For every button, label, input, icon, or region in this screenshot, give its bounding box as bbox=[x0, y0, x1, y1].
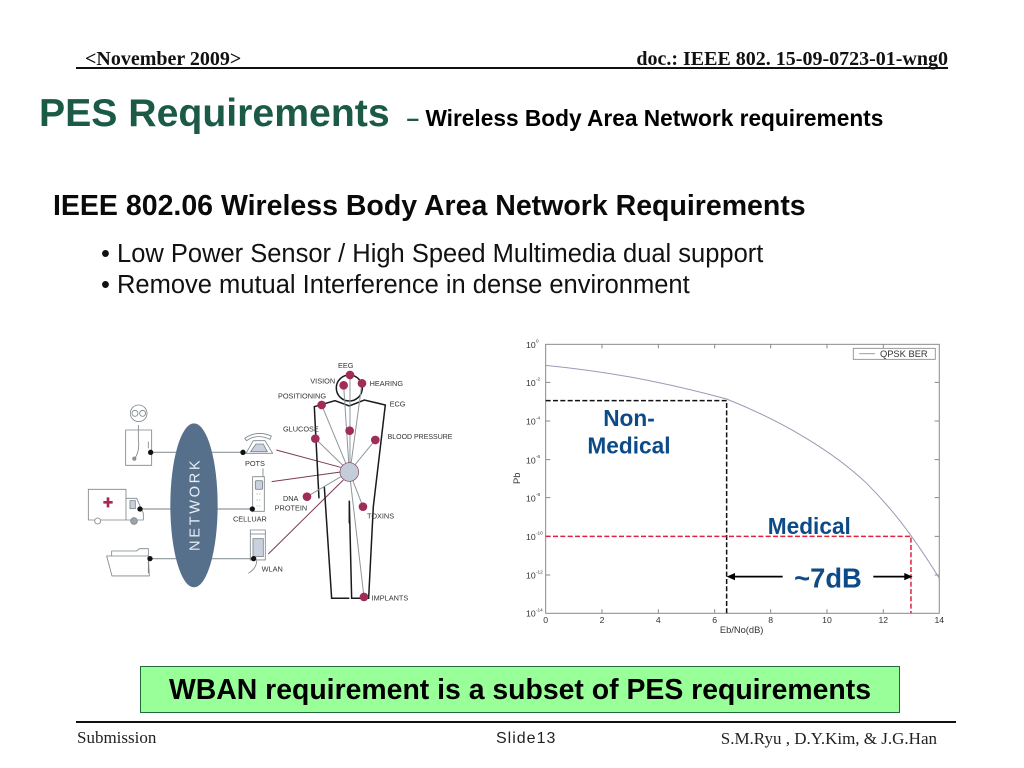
wireless links to hub bbox=[268, 450, 343, 554]
y axis labels: 10 bbox=[526, 417, 536, 427]
sensor labels: EEG bbox=[338, 361, 354, 370]
footer submission: Submission bbox=[77, 728, 156, 747]
x axis labels: 6 bbox=[712, 615, 717, 625]
callout bbox=[140, 666, 900, 713]
footer rule bbox=[76, 721, 956, 723]
y axis exponents: 0 bbox=[536, 339, 539, 344]
network connection lines bbox=[140, 452, 254, 559]
icon: wlan device: WLAN bbox=[262, 564, 283, 573]
y axis labels: 10 bbox=[526, 532, 536, 542]
BER curve bbox=[546, 365, 939, 578]
sensor labels: PROTEIN bbox=[275, 504, 307, 513]
bullet list: • Remove mutual Interference in dense environment bbox=[101, 271, 690, 299]
chart annotations: Non- bbox=[603, 405, 655, 431]
bullet list: • Low Power Sensor / High Speed Multimedia dual support bbox=[101, 240, 763, 268]
chart annotations: Medical bbox=[768, 513, 851, 539]
icon: folder bbox=[107, 549, 153, 576]
y axis exponents bbox=[536, 339, 543, 612]
y axis labels: 10 bbox=[526, 340, 536, 350]
y axis labels: 10 bbox=[526, 455, 536, 465]
x axis labels: 10 bbox=[822, 615, 832, 625]
hub bbox=[340, 463, 359, 481]
header date: <November 2009> bbox=[85, 48, 241, 70]
non-medical threshold bbox=[546, 401, 727, 613]
icon: ambulance bbox=[88, 489, 143, 524]
chart annotations: ~7dB bbox=[794, 562, 862, 593]
y axis exponents: -10 bbox=[536, 531, 543, 536]
section heading: IEEE 802.06 Wireless Body Area Network Requirements bbox=[53, 190, 806, 222]
title: PES Requirements – Wireless Body Area Network requirements bbox=[39, 92, 883, 135]
x axis labels: 0 bbox=[543, 615, 548, 625]
icon: telephone bbox=[240, 433, 273, 468]
x axis labels bbox=[543, 615, 944, 625]
y axis labels: 10 bbox=[526, 571, 536, 581]
legend bbox=[853, 348, 935, 359]
sensor links bbox=[307, 375, 375, 597]
sensor labels: HEARING bbox=[370, 379, 403, 388]
sensor labels: TOXINS bbox=[367, 511, 394, 520]
header document number: doc.: IEEE 802. 15-09-0723-01-wng0 bbox=[636, 48, 948, 70]
icon: doctor bbox=[126, 405, 153, 465]
chart annotations bbox=[587, 405, 862, 593]
bullet list bbox=[101, 240, 764, 299]
sensor labels: VISION bbox=[310, 376, 335, 385]
icon: cell phone: CELLUAR bbox=[233, 515, 267, 524]
x axis labels: 8 bbox=[768, 615, 773, 625]
sensor labels: IMPLANTS bbox=[372, 594, 408, 603]
x axis labels: 12 bbox=[878, 615, 888, 625]
footer slide number: Slide13 bbox=[496, 730, 556, 747]
sensors bbox=[303, 371, 380, 601]
y axis exponents: -12 bbox=[536, 569, 543, 574]
sensor labels: POSITIONING bbox=[278, 392, 326, 401]
callout: WBAN requirement is a subset of PES requirements bbox=[169, 674, 871, 706]
chart annotations: Medical bbox=[587, 433, 671, 459]
network ellipse bbox=[170, 423, 218, 587]
y axis labels: 10 bbox=[526, 493, 536, 503]
icon: wlan device bbox=[248, 530, 283, 573]
y axis title: Pb bbox=[512, 473, 522, 484]
plot frame and ticks bbox=[546, 344, 939, 613]
y axis exponents: -2 bbox=[536, 377, 541, 382]
medical threshold bbox=[546, 536, 911, 613]
sensor labels: BLOOD PRESSURE bbox=[388, 434, 453, 441]
y axis exponents: -6 bbox=[536, 454, 541, 459]
sensor labels: ECG bbox=[390, 400, 406, 409]
x axis title: Eb/No(dB) bbox=[720, 625, 763, 635]
sensor labels: DNA bbox=[283, 494, 299, 503]
y axis labels: 10 bbox=[526, 609, 536, 619]
y axis labels: 10 bbox=[526, 378, 536, 388]
x axis labels: 4 bbox=[656, 615, 661, 625]
icon: cell phone bbox=[233, 468, 267, 524]
y axis exponents: -4 bbox=[536, 415, 541, 420]
x axis labels: 14 bbox=[934, 615, 944, 625]
y axis exponents: -8 bbox=[536, 492, 541, 497]
header rule bbox=[76, 67, 948, 69]
legend: QPSK BER bbox=[880, 349, 928, 359]
icon: telephone: POTS bbox=[245, 459, 265, 468]
y axis exponents: -14 bbox=[536, 607, 543, 612]
body outline bbox=[314, 375, 385, 598]
arrows bbox=[727, 573, 913, 580]
y axis labels bbox=[526, 340, 536, 619]
footer authors: S.M.Ryu , D.Y.Kim, & J.G.Han bbox=[721, 729, 937, 748]
sensor labels bbox=[275, 361, 453, 603]
network ellipse: NETWORK bbox=[187, 460, 203, 551]
x axis labels: 2 bbox=[600, 615, 605, 625]
sensor labels: GLUCOSE bbox=[283, 424, 319, 433]
